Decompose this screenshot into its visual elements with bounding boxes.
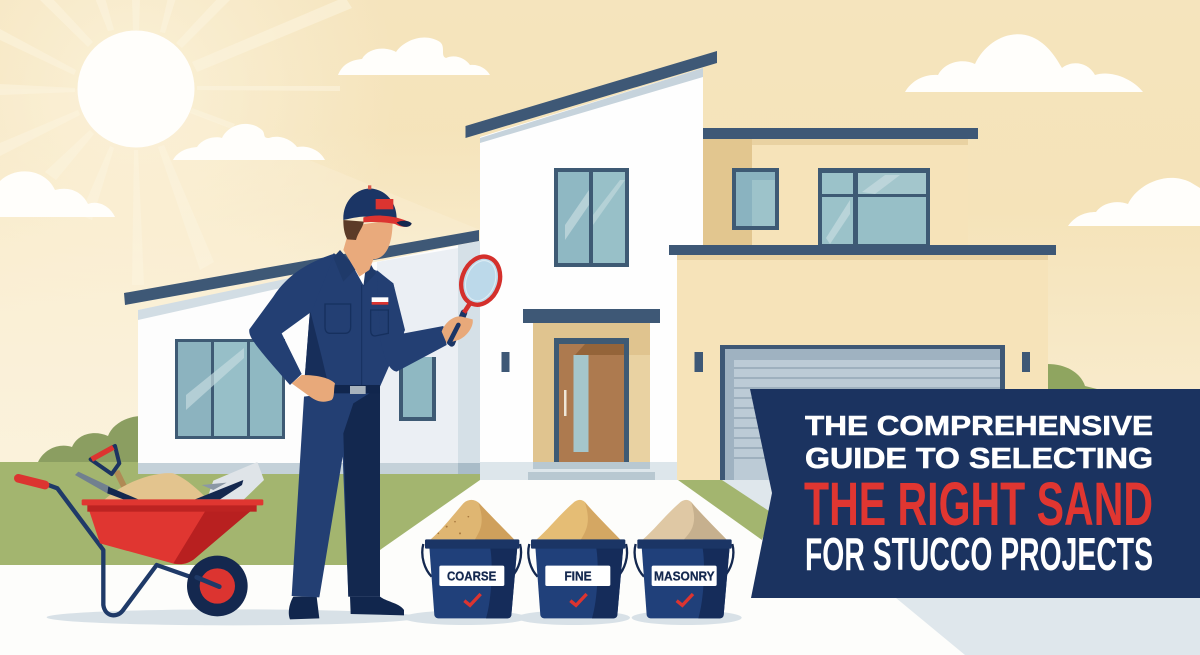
lawn: left [0,462,480,565]
icon: check mark [677,594,693,605]
title banner [750,389,1200,598]
wheel [187,556,248,616]
neck and face [343,220,393,277]
label: coarse: COARSE [447,570,496,584]
cloud: beside sun [173,124,325,160]
pockets [325,304,351,333]
wheelbarrow, tools and worker [18,185,507,625]
bucket: coarse [422,500,521,618]
sand pile: fine [537,500,620,539]
frame [48,485,218,615]
wall lamp: entry [502,352,510,372]
sand buckets [403,500,742,625]
garage door [720,345,1005,494]
wall lamp: garage left [694,352,703,372]
door [554,338,629,462]
arm: holding magnifier [377,270,447,372]
hand holding magnifier [442,316,473,343]
window: left wing small [399,357,436,421]
sand pile: coarse [431,500,514,539]
name tag [372,297,388,305]
label: fine: FINE [564,570,592,584]
entry surround [533,323,650,462]
canopy [523,309,660,323]
bucket: masonry [635,500,733,618]
bush: left [38,416,140,462]
house: left wing [124,230,480,474]
house: central white volume [466,51,717,480]
collar and shirt [355,270,370,285]
bucket shadows [403,610,742,625]
lawn: right [678,480,772,540]
belt [330,385,380,394]
cloud: top centre [338,37,490,75]
window: upper small [732,168,779,230]
tray [87,505,257,564]
driveway: garage side [722,480,1200,655]
worker [249,185,507,619]
label: masonry: MASONRY [654,570,715,584]
sun rays [0,0,352,285]
title: line 1: THE COMPREHENSIVE [805,410,1153,441]
icon: check mark [464,594,481,605]
cloud: lower right [1068,178,1200,226]
cap [343,185,412,227]
cloud: left [0,171,115,217]
house: right beige volume [669,128,1056,480]
wheelbarrow [18,446,264,616]
window: upper large [818,168,930,245]
arm: hand on hip [249,253,335,385]
shoes [289,597,319,619]
steps [528,462,655,480]
legs [292,387,380,597]
cloud: top right [905,34,1143,92]
wall lamp: garage right [1022,352,1030,372]
sand pile: masonry [643,500,726,539]
icon: sun [78,30,194,148]
window: central upper [554,168,629,267]
torso [304,253,405,387]
tools in wheelbarrow [75,446,264,500]
sky background [0,0,1200,470]
hand on hip [292,375,335,402]
icon: check mark [570,594,587,605]
roof: mid flat [669,245,1056,255]
title: line 2: GUIDE TO SELECTING [805,443,1153,475]
window: left wing large [175,339,285,439]
bush: right [1047,364,1097,389]
roof: upper flat [703,128,978,139]
ground shadow [47,609,420,625]
icon: magnifying glass [452,251,507,343]
bucket: fine [528,500,627,618]
